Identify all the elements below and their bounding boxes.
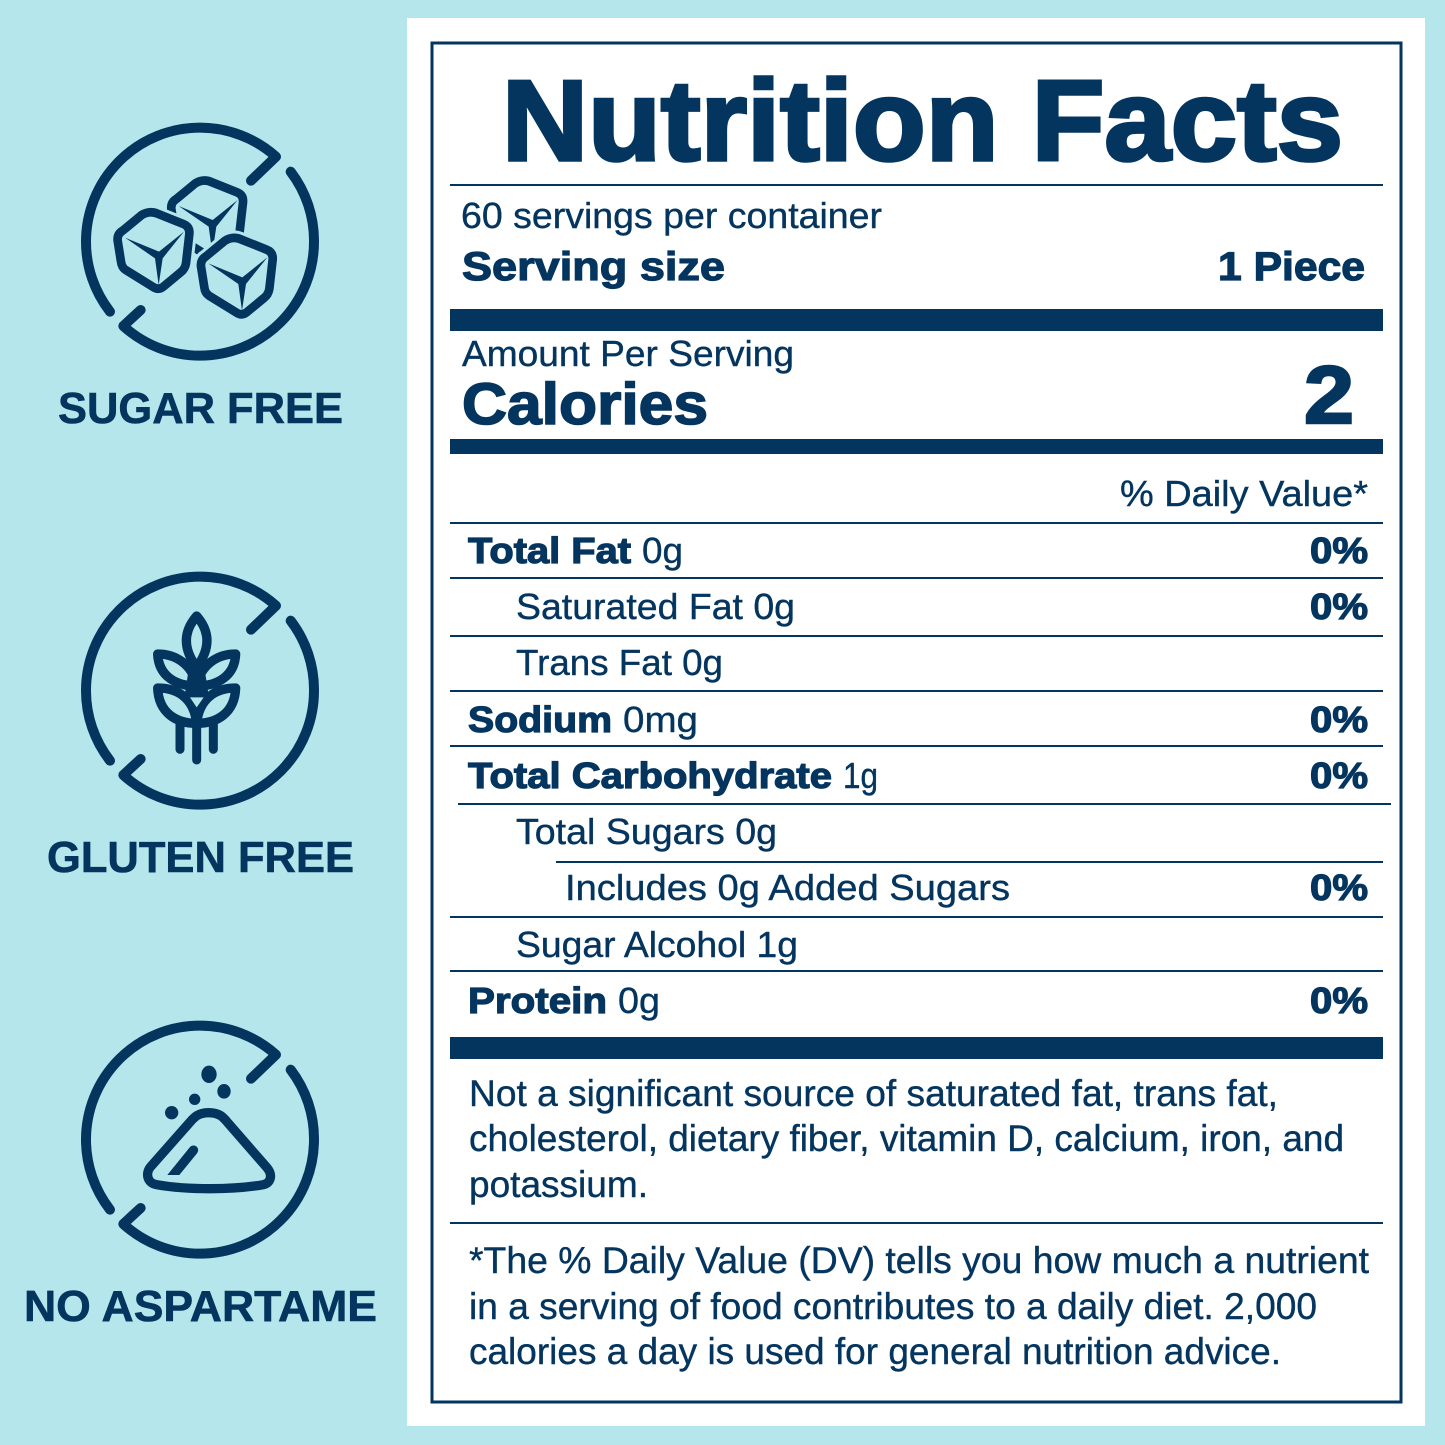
label: gluten free: GLUTEN FREE — [47, 833, 354, 882]
panel: nutrition facts label — [407, 18, 1425, 1426]
row: saturated fat — [516, 586, 1368, 627]
row: total carbohydrate: 1g — [843, 755, 878, 796]
row: sodium: 0mg — [623, 699, 698, 740]
row: protein: 0% — [1310, 980, 1368, 1021]
panel: sugar free badge — [58, 128, 343, 433]
row: added sugars: 0% — [1310, 867, 1368, 908]
row: trans fat: Trans Fat 0g — [516, 642, 723, 683]
row: added sugars: Includes 0g Added Sugars — [565, 867, 1010, 908]
label card background — [407, 18, 1425, 1426]
icon: crossed-out powder pile — [86, 1026, 314, 1254]
servings per container: 60 servings per container — [461, 195, 882, 236]
row: total carbohydrate: 0% — [1310, 755, 1368, 796]
footnote: daily value explanation: calories a day is used for general nutrition advice. — [469, 1331, 1281, 1372]
row: protein — [468, 980, 1368, 1021]
note: not a significant source: Not a significant source of saturated fat, trans fat, — [469, 1073, 1278, 1114]
row: saturated fat: 0% — [1310, 586, 1368, 627]
label: sugar free: SUGAR FREE — [58, 384, 343, 433]
note: not a significant source: potassium. — [469, 1164, 648, 1205]
amount per serving: Amount Per Serving — [462, 333, 794, 374]
row: protein: 0g — [618, 980, 660, 1021]
row: total carbohydrate: Total Carbohydrate — [468, 755, 832, 796]
row: total fat: Total Fat — [468, 530, 631, 571]
calories — [462, 350, 1354, 441]
label border — [432, 43, 1401, 1402]
footnote: daily value explanation — [469, 1240, 1370, 1372]
panel: no aspartame badge — [24, 1026, 377, 1331]
serving size: 1 Piece — [1218, 245, 1365, 289]
title: Nutrition Facts — [502, 58, 1343, 185]
serving size: Serving size — [462, 245, 725, 289]
panel: gluten free badge — [47, 577, 354, 882]
row: total sugars: Total Sugars 0g — [516, 811, 777, 852]
calories: Calories — [462, 372, 708, 437]
label: no aspartame: NO ASPARTAME — [24, 1282, 377, 1331]
row: total fat: 0g — [642, 530, 683, 571]
row: saturated fat: Saturated Fat 0g — [516, 586, 795, 627]
icon: crossed-out wheat — [86, 577, 314, 805]
row: sodium: Sodium — [468, 699, 612, 740]
daily value header: % Daily Value* — [1120, 473, 1368, 514]
row: total carbohydrate — [468, 755, 1368, 796]
footnote: daily value explanation: *The % Daily Value (DV) tells you how much a nutrient — [469, 1240, 1370, 1281]
row: total fat: 0% — [1310, 530, 1368, 571]
note: not a significant source: cholesterol, dietary fiber, vitamin D, calcium, iron, and — [469, 1118, 1344, 1159]
row: protein: Protein — [468, 980, 607, 1021]
note: not a significant source — [469, 1073, 1344, 1205]
row: added sugars — [565, 867, 1368, 908]
row: sugar alcohol: Sugar Alcohol 1g — [516, 924, 798, 965]
footnote: daily value explanation: in a serving of food contributes to a daily diet. 2,000 — [469, 1286, 1317, 1327]
icon: crossed-out sugar cubes — [86, 128, 314, 356]
row: sodium — [468, 699, 1368, 740]
row: sodium: 0% — [1310, 699, 1368, 740]
row: total fat — [468, 530, 1368, 571]
serving size — [462, 245, 1365, 289]
calories: 2 — [1304, 350, 1354, 441]
